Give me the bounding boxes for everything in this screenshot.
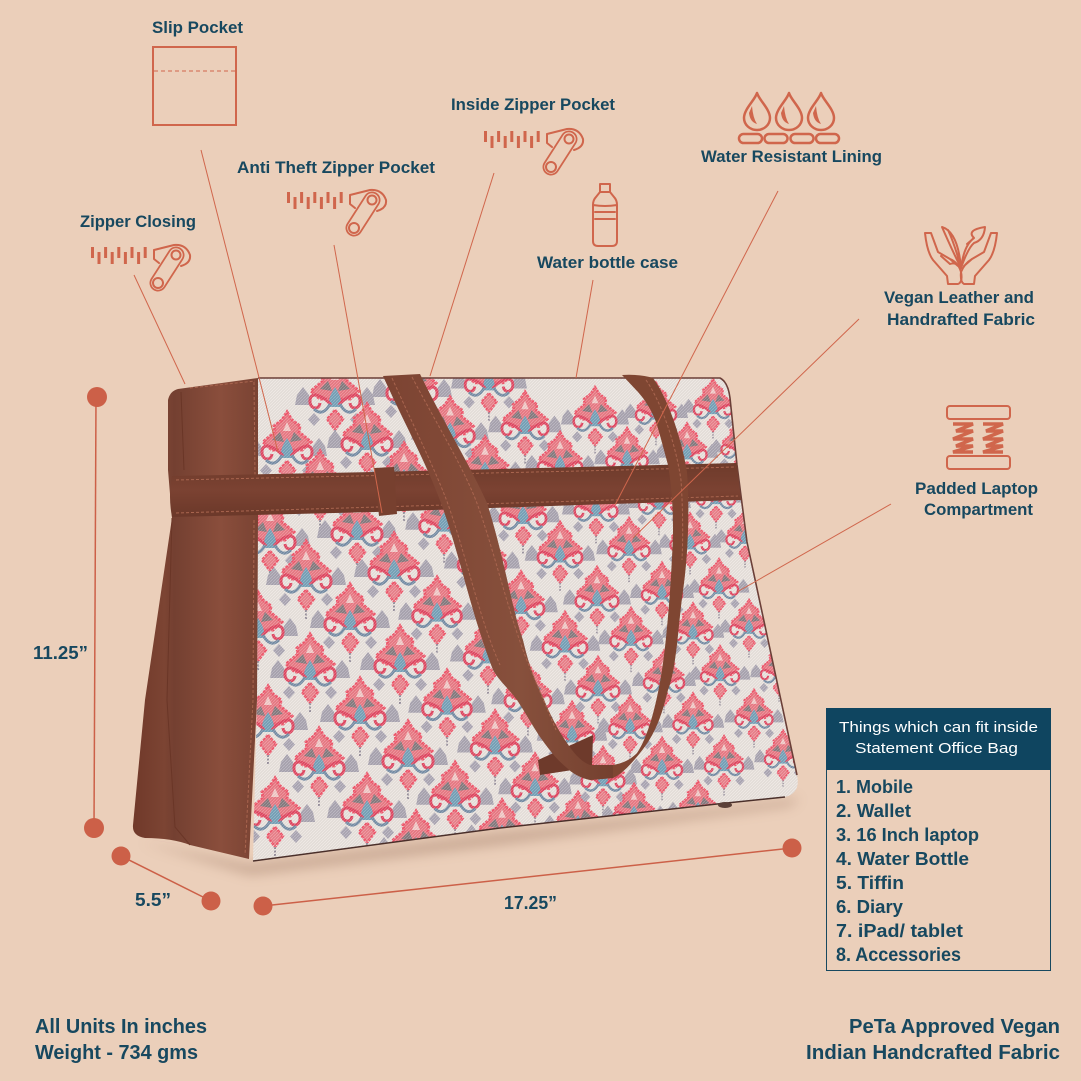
left leather gusset: [133, 378, 258, 859]
heading: vegan leather: Vegan Leather and: [884, 288, 1034, 307]
foot: [718, 802, 732, 808]
footer: units and weight: Weight - 734 gms: [35, 1042, 198, 1064]
icon: anti theft zipper: [288, 190, 386, 233]
heading: water bottle case: Water bottle case: [537, 253, 678, 272]
panel header text: Statement Office Bag: [855, 740, 1018, 757]
gusset stitching: [190, 381, 255, 855]
water bottle leader: [576, 280, 593, 378]
footer: units and weight: All Units In inches: [35, 1016, 207, 1038]
footer: vegan fabric note: Indian Handcrafted Fabric: [806, 1042, 1060, 1064]
footer: units and weight: [35, 1016, 207, 1064]
belt strap: [170, 463, 741, 517]
inside zipper leader: [430, 173, 494, 376]
bottom edge: [253, 797, 785, 861]
icon: inside zipper: [486, 129, 583, 172]
footer: vegan fabric note: PeTa Approved Vegan: [849, 1016, 1060, 1038]
panel list: 8. Accessories: [836, 945, 961, 966]
footer: vegan fabric note: [806, 1016, 1060, 1064]
heading: vegan leather: Handrafted Fabric: [887, 310, 1035, 329]
panel list: 4. Water Bottle: [836, 849, 969, 869]
panel list: 5. Tiffin: [836, 873, 904, 893]
panel list: 7. iPad/ tablet: [836, 921, 963, 941]
icon: hands with plant: [925, 227, 997, 284]
heading: padded laptop compartment: Padded Laptop: [915, 479, 1038, 498]
water resistant leader: [615, 191, 778, 505]
icon: water bottle: [593, 184, 617, 246]
dimension: height: [33, 387, 107, 838]
heading: padded laptop compartment: [915, 479, 1038, 519]
icon: water drops: [739, 93, 839, 143]
zipper closing leader: [134, 275, 185, 384]
panel header: [826, 708, 1051, 770]
panel: things which can fit inside: [826, 708, 1051, 970]
bag shadow: [140, 798, 800, 875]
heading: water resistant lining: Water Resistant Lining: [701, 147, 882, 166]
heading: padded laptop compartment: Compartment: [924, 500, 1033, 519]
panel list: [836, 777, 979, 966]
belt stitching: [176, 467, 738, 513]
belt loop: [374, 467, 397, 516]
padded laptop leader: [737, 504, 891, 592]
vegan leather leader: [633, 319, 859, 538]
slip pocket leader: [201, 150, 278, 452]
heading: anti theft zipper pocket: Anti Theft Zipper Pocket: [237, 158, 435, 177]
leader lines: [134, 150, 891, 592]
bag product illustration: [133, 347, 812, 889]
icon: zipper closing: [92, 245, 190, 288]
heading: inside zipper pocket: Inside Zipper Pocket: [451, 95, 615, 114]
heading: vegan leather: [884, 288, 1035, 329]
dimension: width: 17.25”: [504, 893, 557, 913]
panel list: 1. Mobile: [836, 777, 913, 797]
strap stitching: [392, 377, 556, 730]
panel list: 3. 16 Inch laptop: [836, 825, 979, 845]
heading: zipper closing: Zipper Closing: [80, 212, 196, 231]
leather patch: [538, 735, 593, 775]
icon: padded springs: [947, 406, 1010, 469]
dimension: depth: 5.5”: [135, 890, 171, 910]
bottom fabric sliver: [140, 838, 190, 846]
anti theft leader: [334, 245, 382, 513]
heading: slip pocket: Slip Pocket: [152, 18, 243, 37]
top and right piping: [258, 378, 797, 775]
gusset crease: [167, 392, 190, 845]
front fabric panel: [253, 378, 798, 860]
panel header text: Things which can fit inside: [839, 719, 1038, 736]
dimension: depth: [112, 846, 220, 910]
icon: slip pocket: [153, 47, 236, 125]
panel header text: [839, 719, 1038, 757]
front strap half: [383, 374, 613, 780]
dimension: height: 11.25”: [33, 643, 88, 663]
back strap half: [590, 375, 688, 780]
panel list: 2. Wallet: [836, 801, 911, 821]
panel list: 6. Diary: [836, 897, 903, 917]
dimension: width: [254, 838, 802, 916]
